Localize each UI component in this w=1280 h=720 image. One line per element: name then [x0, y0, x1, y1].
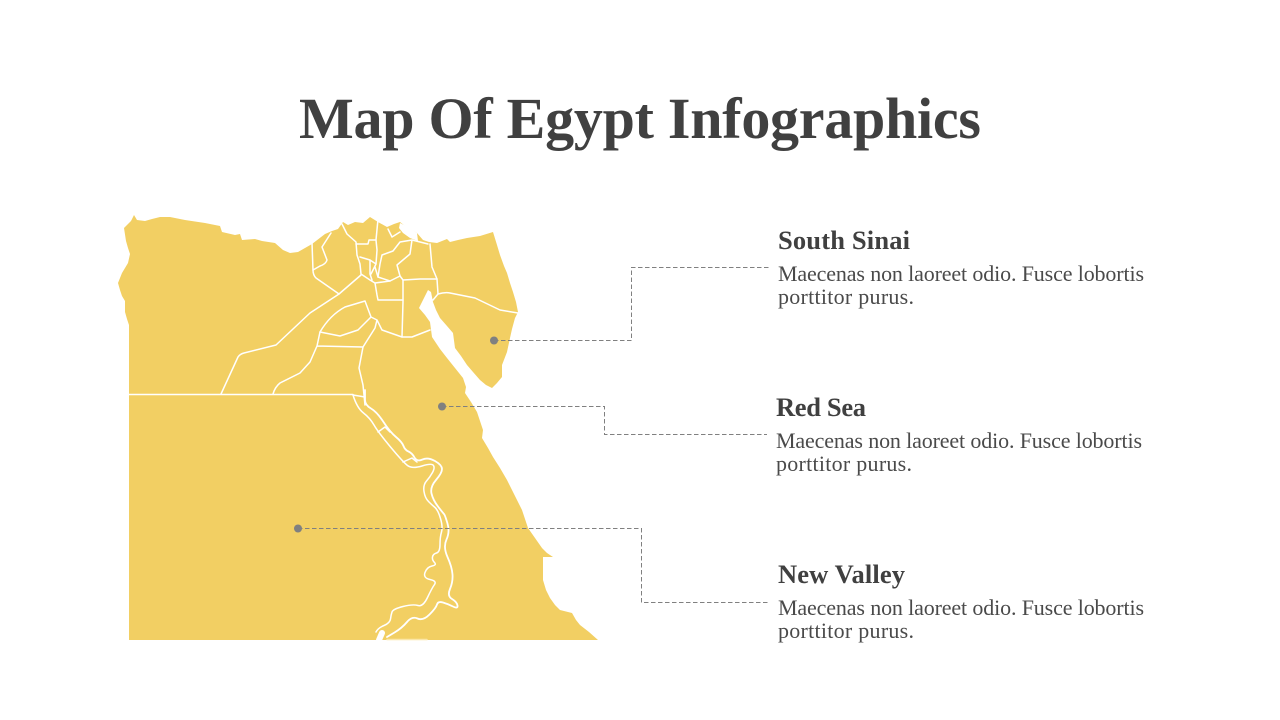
Nile valley east bank [365, 390, 458, 637]
text block: South Sinai: porttitor purus. [778, 284, 914, 309]
text block: Red Sea: Maecenas non laoreet odio. Fusce lobortis [776, 428, 1142, 453]
province borders [129, 219, 518, 640]
text block: New Valley: Maecenas non laoreet odio. Fusce lobortis [778, 595, 1144, 620]
text block: South Sinai: South Sinai [778, 225, 910, 255]
text block: Red Sea: porttitor purus. [776, 451, 912, 476]
leader line: Red Sea [438, 402, 767, 434]
text block: Red Sea: Red Sea [776, 392, 866, 422]
map of Egypt [118, 215, 598, 640]
Lake Nasser [379, 633, 382, 640]
Lake Manzala [399, 223, 418, 241]
text block: New Valley: porttitor purus. [778, 618, 914, 643]
leader line: South Sinai [490, 268, 769, 344]
text block: New Valley [778, 559, 1144, 643]
Nile valley west bank [353, 395, 442, 632]
text block: Red Sea [776, 392, 1142, 476]
text block: South Sinai [778, 225, 1144, 309]
title: Map Of Egypt Infographics [299, 86, 981, 151]
leader line: New Valley [294, 524, 768, 602]
map landmass [118, 215, 598, 640]
text block: New Valley: New Valley [778, 559, 905, 589]
text block: South Sinai: Maecenas non laoreet odio. Fusce lobortis [778, 261, 1144, 286]
